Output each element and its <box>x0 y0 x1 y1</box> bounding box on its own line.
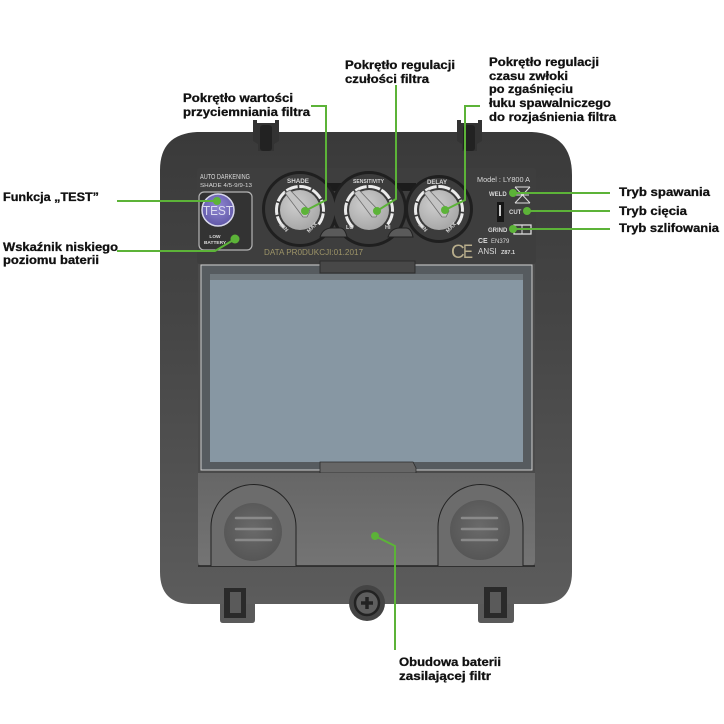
label: delay knob: czasu zwłoki <box>489 69 568 83</box>
control panel <box>197 168 536 264</box>
shade dial: MAX <box>306 221 319 234</box>
helmet filter body <box>160 120 572 623</box>
label: delay knob: łuku spawalniczego <box>489 96 611 110</box>
label: low battery: Wskaźnik niskiego <box>3 240 118 254</box>
label: sensitivity knob <box>345 58 455 86</box>
label: grind mode: Tryb szlifowania <box>619 221 719 235</box>
label: shade knob <box>183 91 310 119</box>
model and mode labels: WELD <box>489 192 507 198</box>
header text: AUTO DARKENING <box>200 172 250 181</box>
callout: weld <box>509 189 610 197</box>
label: delay knob: po zgaśnięciu <box>489 82 573 96</box>
test panel <box>199 192 252 250</box>
CE mark: E <box>463 242 473 263</box>
shade dial: MIN <box>278 222 289 234</box>
callout: low battery <box>117 234 240 251</box>
sensitivity dial: LO <box>346 225 354 231</box>
callout: cut <box>523 207 610 215</box>
label: cut mode: Tryb cięcia <box>619 204 687 218</box>
callout: delay <box>441 106 480 214</box>
delay dial: MIN <box>417 222 428 234</box>
label: sensitivity knob: Pokrętło regulacji <box>345 58 455 72</box>
left battery button <box>211 485 296 566</box>
callout: shade <box>301 106 326 215</box>
model and mode labels: CUT <box>509 210 522 216</box>
label: low battery: poziomu baterii <box>3 253 99 267</box>
test panel: LOW <box>209 234 221 240</box>
sensitivity dial <box>336 177 402 243</box>
delay dial: MAX <box>445 221 458 234</box>
callout: sensitivity <box>373 85 396 215</box>
model and mode labels: GRIND <box>488 228 508 234</box>
label: battery housing <box>399 655 501 683</box>
label: battery housing: zasilającej filtr <box>399 669 491 683</box>
label: test function: Funkcja „TEST” <box>3 190 99 204</box>
model and mode labels <box>477 175 531 256</box>
control panel: SHADE 4/5-9/9-13 <box>200 183 252 189</box>
model and mode labels: EN379 <box>491 239 510 245</box>
label: shade knob: Pokrętło wartości <box>183 91 293 105</box>
model and mode labels: ANSI <box>478 247 497 256</box>
model and mode labels: Z87.1 <box>501 250 515 256</box>
test panel: TEST <box>203 203 233 218</box>
top hinge clips <box>253 120 482 151</box>
model and mode labels: Model : LY800 A <box>477 175 530 184</box>
delay dial: DELAY <box>427 179 448 186</box>
label: shade knob: przyciemniania filtra <box>183 105 310 119</box>
label: sensitivity knob: czułości filtra <box>345 72 429 86</box>
callout: test <box>117 197 221 205</box>
lens window <box>198 261 535 473</box>
label: delay knob: Pokrętło regulacji <box>489 55 599 69</box>
label: low battery <box>3 240 118 267</box>
shade dial: SHADE <box>287 178 310 185</box>
dial recess <box>262 171 473 247</box>
callout: grind <box>509 225 610 233</box>
test panel: BATTERY <box>204 240 227 246</box>
CE mark <box>451 242 473 263</box>
right battery button <box>438 485 523 566</box>
callout: battery housing <box>371 532 395 650</box>
screw <box>349 585 385 621</box>
delay dial <box>406 177 472 243</box>
shade dial <box>267 177 333 243</box>
sensitivity dial: SENSITIVITY <box>353 179 384 185</box>
label: weld mode: Tryb spawania <box>619 185 710 199</box>
label: delay knob: do rozjaśnienia filtra <box>489 110 616 124</box>
CE mark: C <box>451 242 465 263</box>
production date: DATA PR0DUKCJI:01.2017 <box>264 247 363 257</box>
bottom clips <box>220 587 514 623</box>
battery cover <box>198 473 535 566</box>
label: battery housing: Obudowa baterii <box>399 655 501 669</box>
label: delay knob <box>489 55 616 124</box>
sensitivity dial: HI <box>385 225 391 231</box>
model and mode labels: CE <box>478 238 488 245</box>
